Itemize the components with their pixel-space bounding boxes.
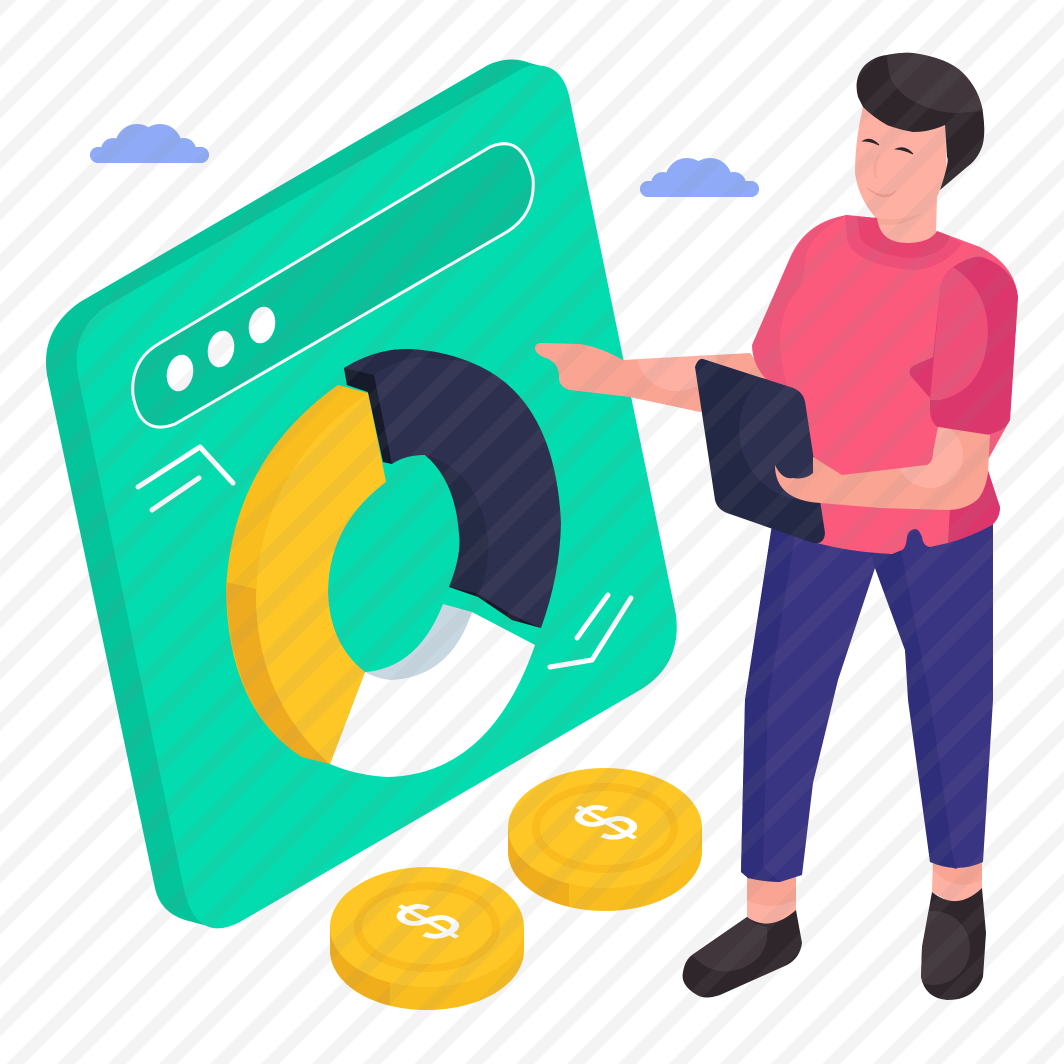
dollar sign: $ bbox=[551, 792, 661, 853]
chevron bottom right bbox=[550, 595, 631, 667]
shirt right shade bbox=[948, 467, 1000, 543]
forearm and hand bbox=[775, 422, 990, 510]
panel side depth bbox=[46, 59, 600, 928]
slice shadow bbox=[365, 604, 472, 680]
shoes bbox=[683, 888, 986, 1000]
panel: browser window bbox=[46, 59, 677, 928]
neck and face bbox=[855, 100, 947, 243]
coin back bbox=[508, 768, 702, 911]
pointing arm bbox=[535, 343, 766, 412]
ankles bbox=[747, 855, 982, 930]
coin front bbox=[330, 867, 524, 1010]
shirt collar bbox=[845, 215, 962, 270]
dollar sign: $ bbox=[373, 891, 483, 952]
shirt bbox=[752, 215, 1018, 554]
tablet bbox=[695, 358, 825, 544]
person bbox=[535, 53, 1018, 1000]
donut chart bbox=[226, 349, 561, 777]
face details bbox=[863, 139, 913, 197]
yellow slice bbox=[226, 385, 386, 764]
cloud left bbox=[90, 124, 209, 163]
shirt left shade bbox=[753, 215, 847, 392]
chevron top left bbox=[138, 447, 233, 510]
panel front face bbox=[77, 65, 677, 928]
dark slice bbox=[344, 349, 561, 628]
pants bbox=[741, 500, 993, 882]
window dots bbox=[163, 304, 279, 394]
white slice bbox=[330, 612, 535, 777]
sleeve bbox=[910, 257, 1018, 435]
address bar bbox=[133, 144, 533, 427]
cloud right bbox=[640, 158, 759, 197]
hair bbox=[857, 53, 984, 190]
neck shadow bbox=[877, 213, 922, 225]
